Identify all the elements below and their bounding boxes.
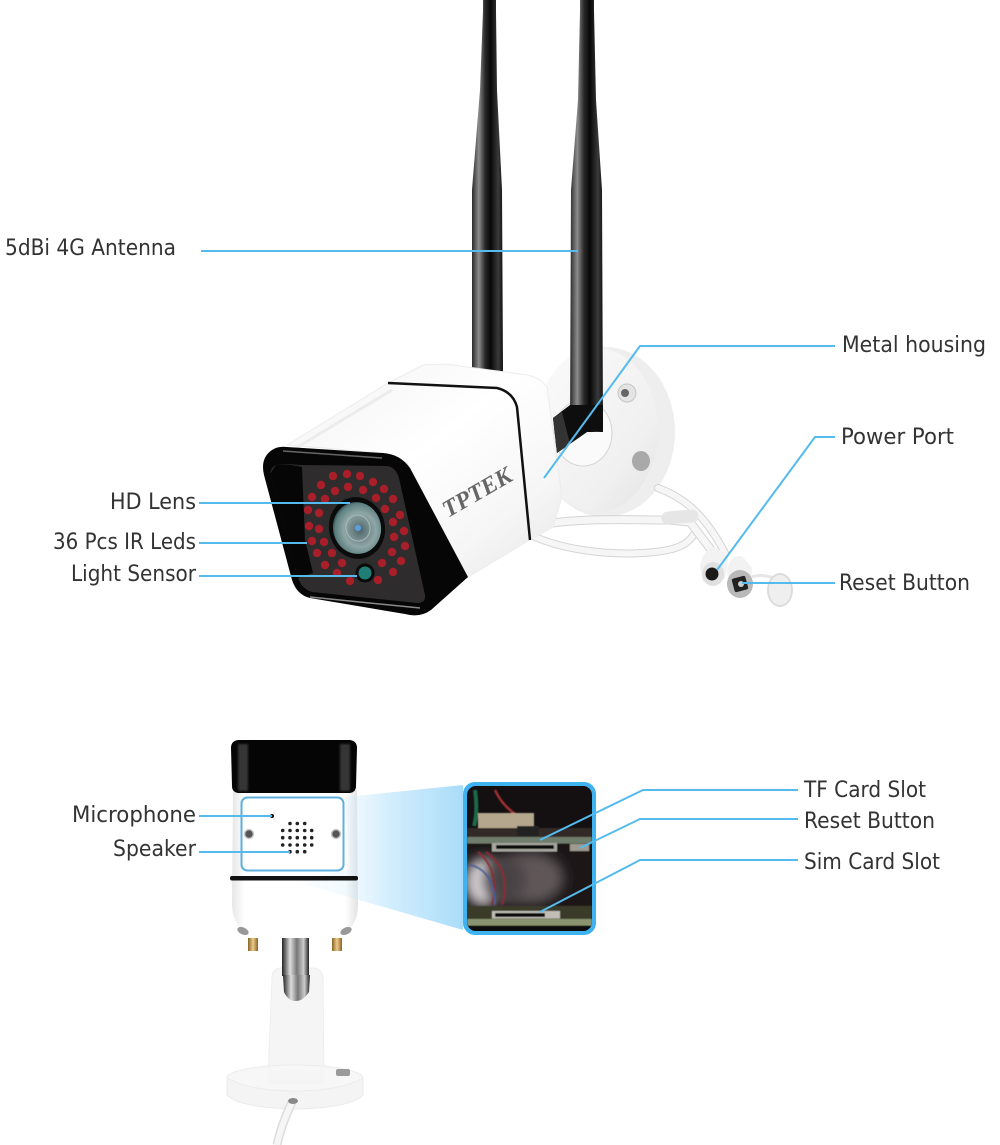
label: antenna: 5dBi 4G Antenna bbox=[5, 236, 176, 261]
power cables and connectors bbox=[535, 488, 792, 606]
right antenna bbox=[570, 0, 603, 432]
inset: circuit board photo bbox=[463, 782, 596, 935]
body seam band bbox=[230, 876, 358, 880]
label: microphone: Microphone bbox=[72, 803, 196, 828]
camera body bbox=[287, 364, 562, 577]
icon: bracket screw bbox=[336, 1069, 350, 1076]
label: metal housing: Metal housing bbox=[842, 333, 986, 358]
icon: reset button connector bbox=[727, 556, 753, 598]
knurled swivel bbox=[283, 975, 310, 1001]
icon: panel screws bbox=[244, 830, 340, 838]
label: inner reset button: Reset Button bbox=[804, 809, 935, 834]
icon: microphone hole bbox=[270, 814, 274, 818]
label: SIM card slot: Sim Card Slot bbox=[804, 850, 940, 875]
label: power port: Power Port bbox=[841, 425, 954, 450]
light sensor bbox=[356, 564, 374, 582]
label: reset button: Reset Button bbox=[839, 571, 970, 596]
label: TF card slot: TF Card Slot bbox=[803, 778, 926, 803]
IR LED ring bbox=[304, 470, 409, 585]
label: HD lens: HD Lens bbox=[110, 490, 196, 515]
label: light sensor: Light Sensor bbox=[71, 562, 197, 587]
icon: power port connector bbox=[700, 547, 728, 586]
left antenna bbox=[472, 0, 503, 372]
lower camera body bbox=[231, 740, 358, 937]
antenna connectors bbox=[248, 938, 342, 951]
icon: speaker holes bbox=[281, 822, 314, 854]
antenna swivel joint bbox=[553, 405, 603, 453]
lens bbox=[323, 492, 391, 564]
cable bbox=[277, 1102, 292, 1145]
callout lines bbox=[199, 251, 835, 912]
speaker panel outline bbox=[242, 798, 344, 870]
label: IR LEDs: 36 Pcs IR Leds bbox=[53, 530, 196, 555]
camera front face bbox=[263, 447, 468, 615]
wall mount disc bbox=[535, 347, 675, 517]
mounting bracket bbox=[227, 938, 363, 1145]
brand logo: TPTEK bbox=[438, 462, 519, 523]
metal neck bbox=[282, 938, 309, 976]
icon: connector cap bbox=[768, 574, 792, 606]
labels bbox=[5, 236, 986, 875]
zoom beam bbox=[290, 785, 463, 930]
label: speaker: Speaker bbox=[113, 837, 197, 862]
